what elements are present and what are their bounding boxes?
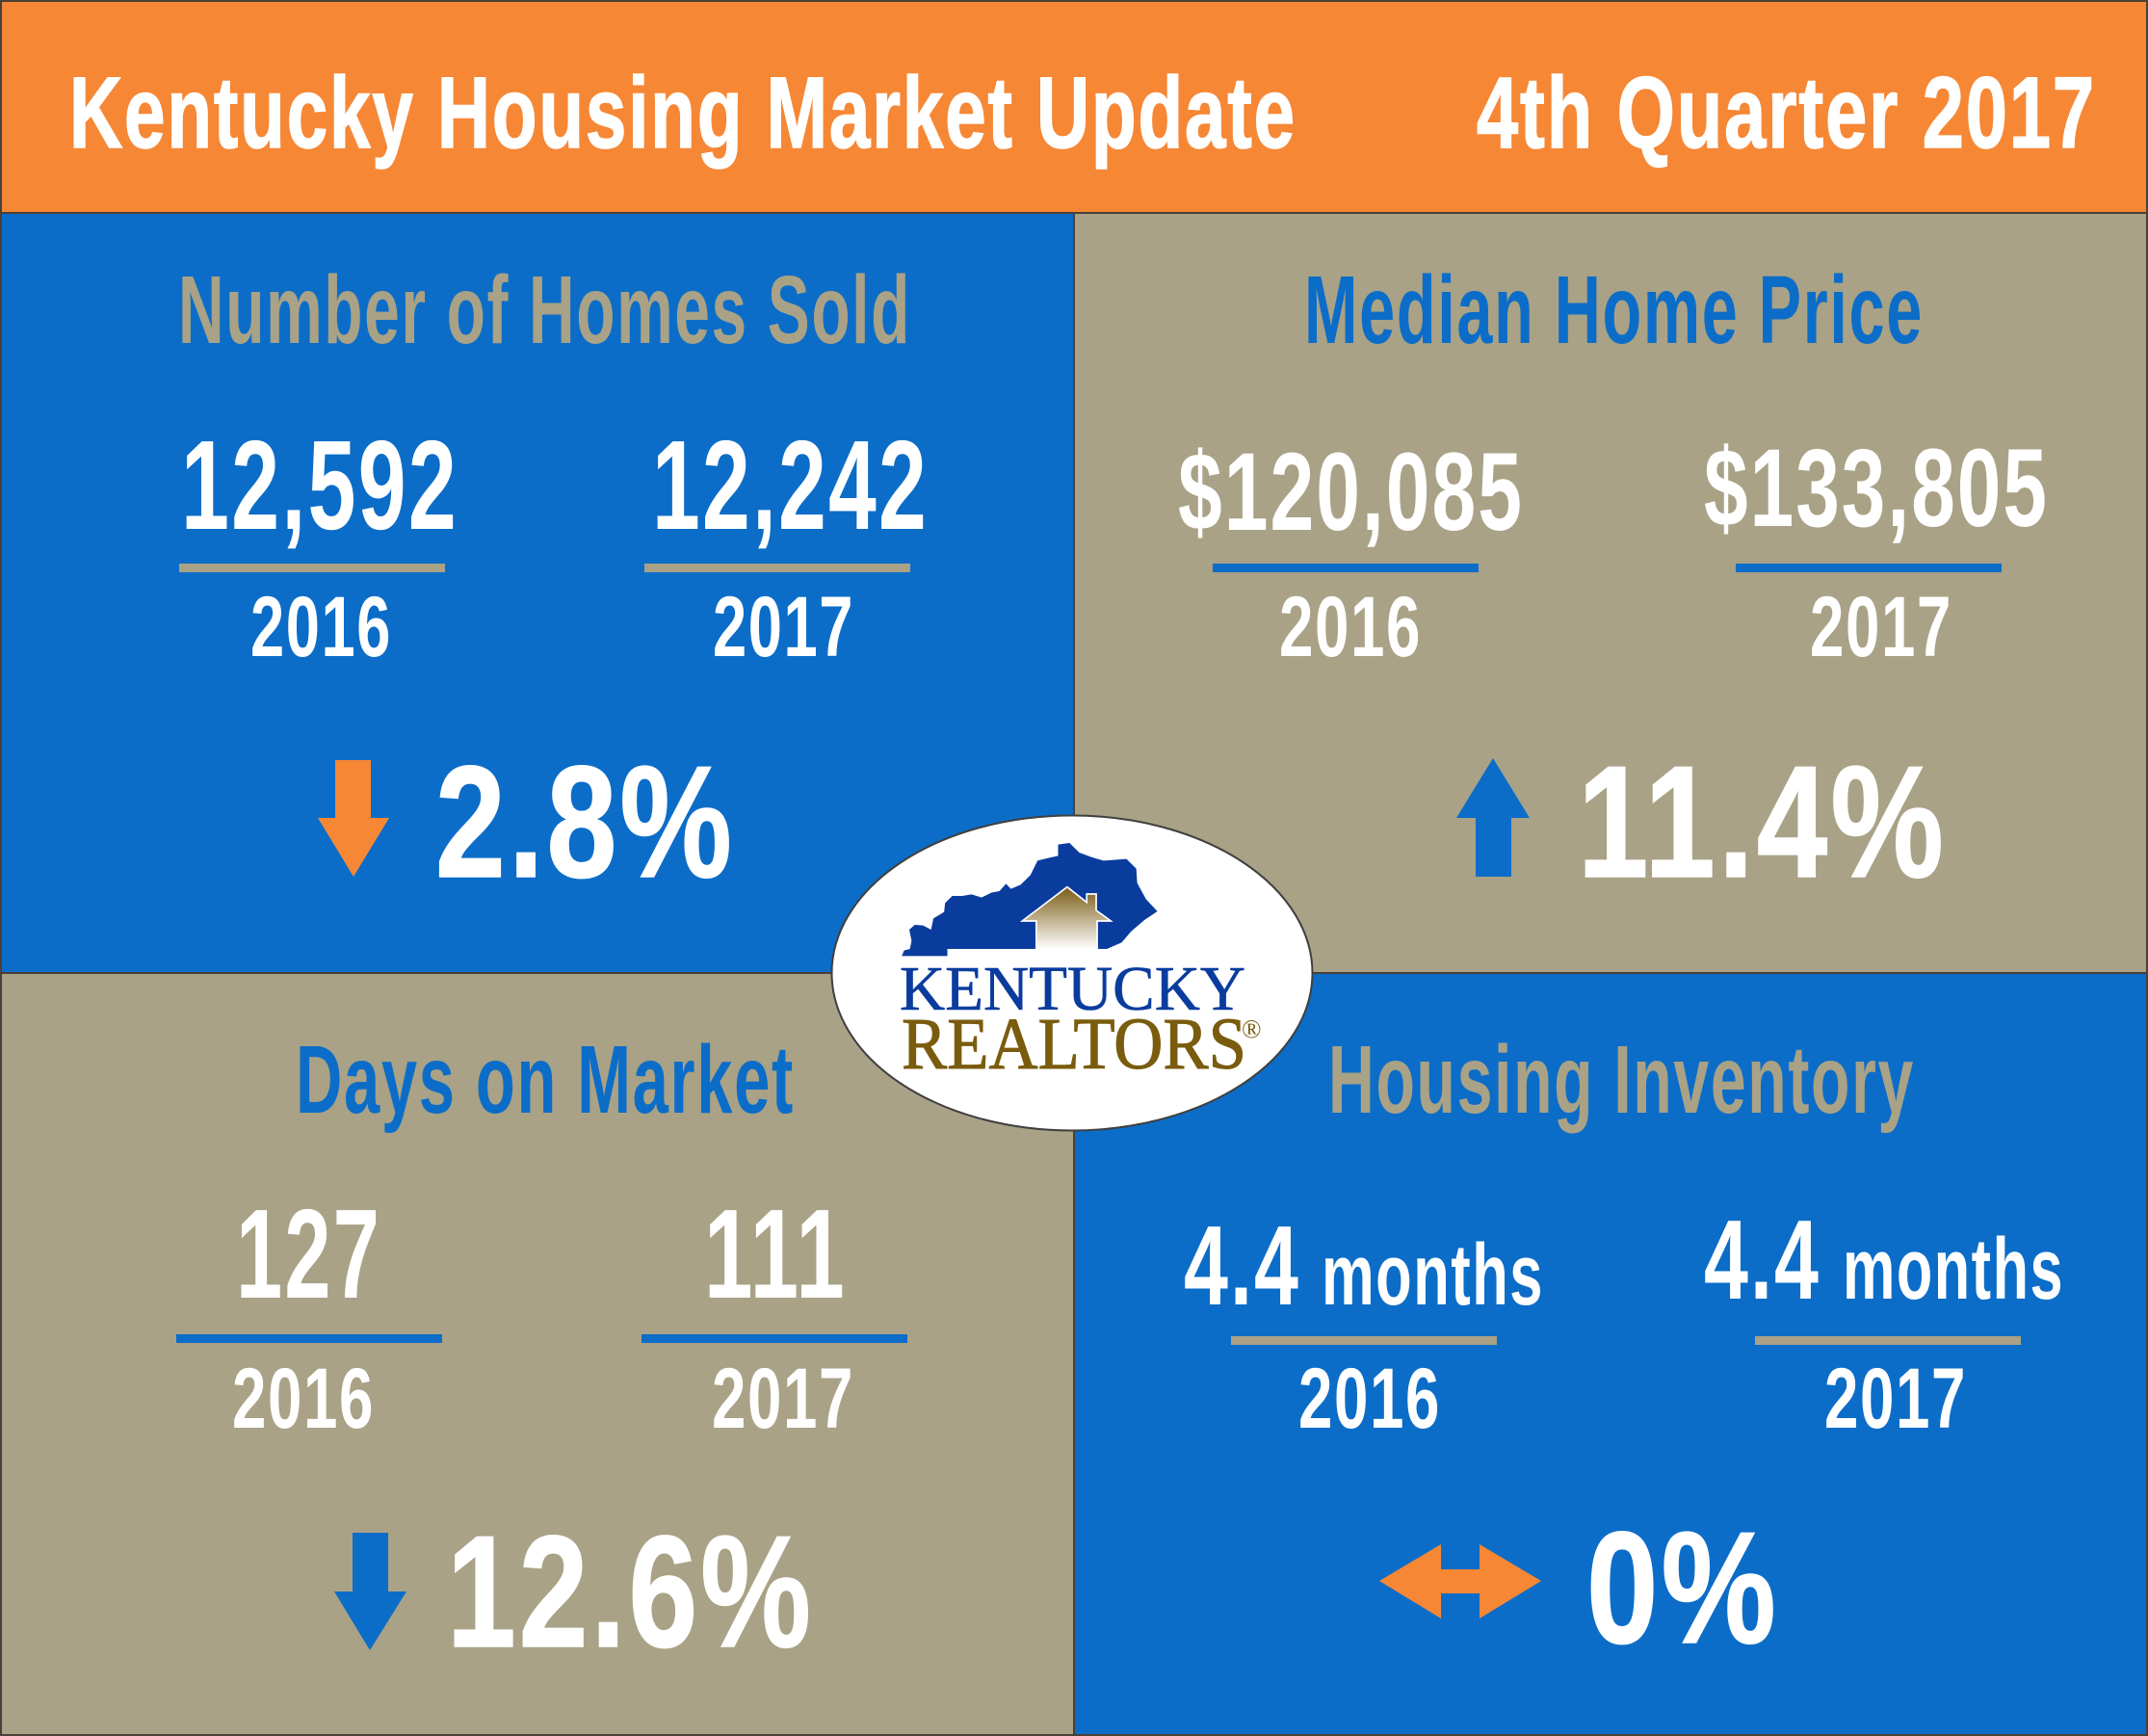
value 2017: 111 bbox=[704, 1183, 847, 1325]
panel: housing inventory bbox=[1074, 973, 2147, 1735]
value 2016: 127 bbox=[236, 1183, 381, 1325]
heading: Days on Market bbox=[296, 1026, 795, 1134]
value 2016: 4.4 bbox=[1184, 1202, 1300, 1328]
value 2017 bbox=[1704, 1197, 2064, 1323]
change percentage: 2.8% bbox=[435, 733, 735, 910]
registered mark: ® bbox=[1242, 1014, 1262, 1043]
panel: median home price bbox=[1074, 213, 2147, 973]
value 2017: 12,242 bbox=[652, 414, 929, 556]
year 2016: 2016 bbox=[232, 1350, 375, 1446]
value 2016: months bbox=[1322, 1227, 1544, 1324]
icon: down arrow bbox=[318, 760, 389, 877]
panel: days on market bbox=[1, 973, 1074, 1735]
change percentage: 12.6% bbox=[447, 1503, 814, 1680]
value 2016: 12,592 bbox=[181, 414, 458, 556]
icon: Kentucky state map bbox=[902, 843, 1158, 956]
year 2017: 2017 bbox=[1810, 578, 1952, 674]
year 2017: 2017 bbox=[713, 578, 854, 674]
year 2016: 2016 bbox=[1298, 1350, 1441, 1446]
panel: number of homes sold bbox=[1, 213, 1074, 973]
header banner bbox=[1, 1, 2147, 213]
heading: Number of Homes Sold bbox=[178, 256, 911, 364]
year 2016: 2016 bbox=[1279, 578, 1422, 674]
title: Kentucky Housing Market Update bbox=[69, 57, 1297, 170]
value 2016 bbox=[1184, 1202, 1544, 1328]
logo word: REALTORS: REALTORS bbox=[902, 1004, 1246, 1085]
year 2016: 2016 bbox=[250, 578, 392, 674]
icon: double-headed arrow bbox=[1379, 1544, 1541, 1618]
icon: down arrow bbox=[334, 1533, 406, 1650]
change percentage: 0% bbox=[1586, 1499, 1779, 1676]
year 2017: 2017 bbox=[712, 1350, 854, 1446]
icon: house bbox=[1022, 887, 1111, 949]
value 2016: $120,085 bbox=[1178, 431, 1524, 554]
logo: Kentucky Realtors bbox=[832, 815, 1312, 1131]
year 2017: 2017 bbox=[1824, 1350, 1967, 1446]
value 2017: 4.4 bbox=[1704, 1197, 1821, 1323]
change percentage: 11.4% bbox=[1578, 733, 1947, 910]
icon: up arrow bbox=[1456, 758, 1530, 877]
logo word: KENTUCKY: KENTUCKY bbox=[900, 954, 1245, 1024]
